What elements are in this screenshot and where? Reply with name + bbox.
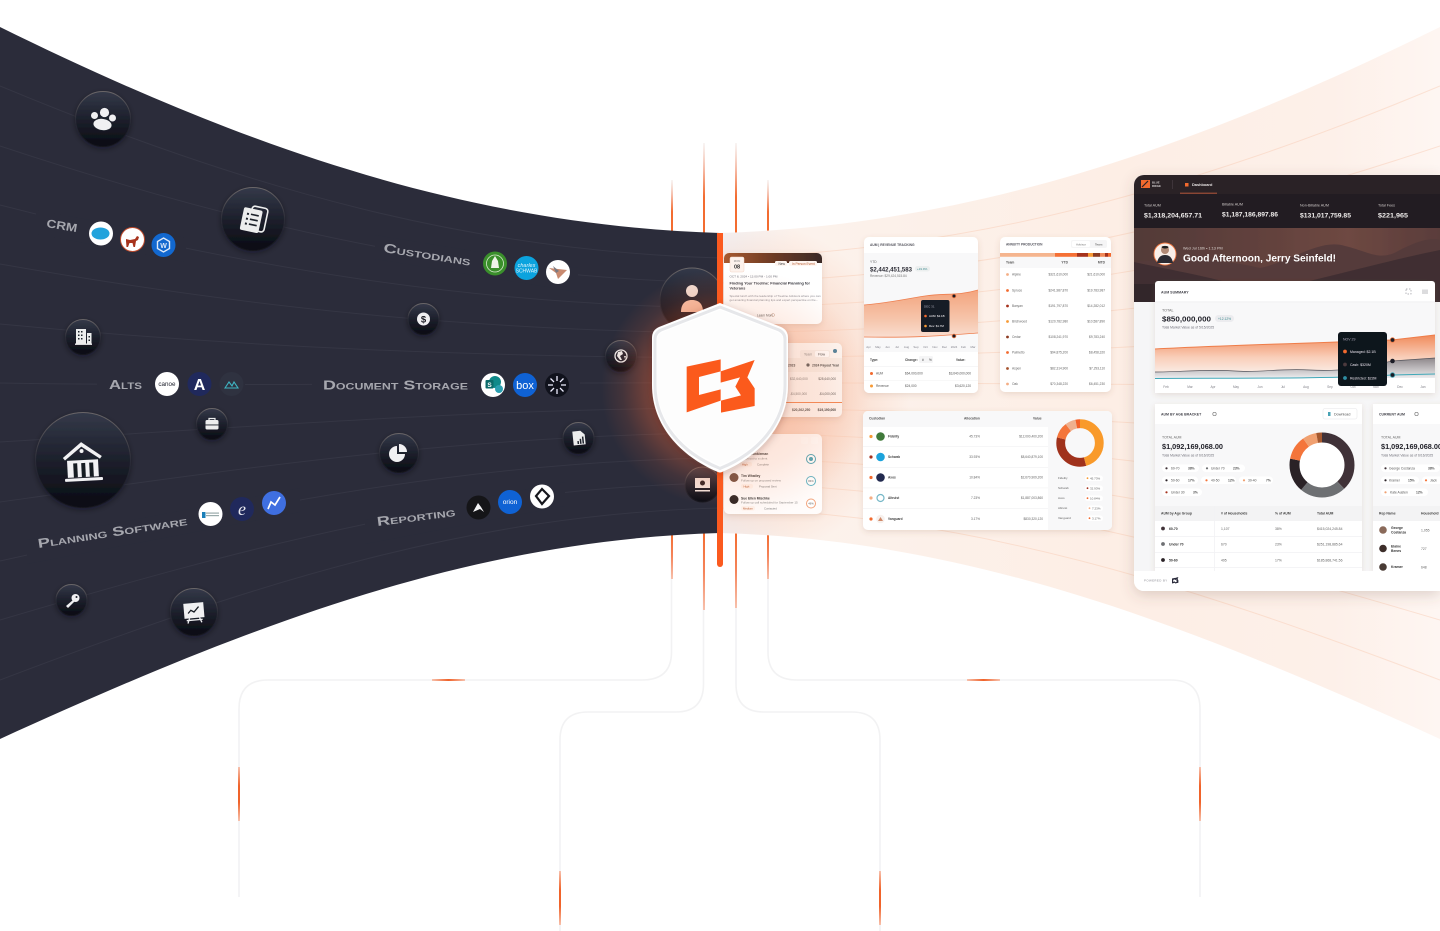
table rows: Schwab — [888, 455, 900, 459]
axis labels: Jul — [895, 345, 899, 349]
axis labels — [866, 345, 976, 349]
icon: dollar — [408, 304, 439, 334]
logo group: document storage: S — [487, 382, 492, 389]
card: tasks: Tim Whatley — [741, 474, 761, 478]
table rows: Fidelity — [888, 434, 899, 438]
shield emblem — [652, 303, 788, 472]
centre glow — [608, 277, 717, 500]
card: AUM revenue tracking: % — [929, 358, 932, 362]
card: AUM revenue tracking: $64,000,000 — [905, 372, 923, 376]
legend pills: 23% — [1233, 466, 1240, 470]
metrics strip: $1,318,204,657.71 — [1144, 212, 1202, 220]
icon: money under the shield — [685, 467, 720, 502]
card: event: MON — [734, 259, 740, 263]
card: custodian allocation: Custodian — [869, 416, 885, 420]
card: AUM summary: $850,000,000 — [1162, 314, 1211, 324]
card: AUM by age bracket: $1,092,169,068.00 — [1162, 444, 1223, 451]
card: AUM revenue tracking: Revenue: $29,424,515.84 — [870, 274, 907, 278]
table rows: 3.17% — [971, 517, 980, 521]
card: current AUM: George — [1391, 526, 1403, 530]
age table: $415,024,245.84 — [1317, 527, 1343, 531]
table rows: $8,640,879,100 — [1021, 455, 1043, 459]
card: payout table: -$4,000,000 — [819, 392, 836, 396]
legend pills: 30-40 — [1248, 478, 1257, 482]
legend pills: 7% — [1266, 478, 1271, 482]
card: AUM revenue tracking: Revenue — [876, 384, 889, 388]
card: AUM revenue tracking: Type: — [870, 358, 878, 362]
card: current AUM: TOTAL AUM — [1381, 436, 1400, 440]
card: event: Veterans — [730, 286, 745, 290]
age table — [1161, 512, 1343, 562]
logo: orange flag mark — [687, 359, 755, 413]
logo group: custodians: SCHWAB — [516, 268, 538, 274]
chart tooltip — [1338, 332, 1387, 386]
axis labels: Aug — [904, 345, 909, 349]
card: current AUM: 727 — [1421, 547, 1427, 551]
card: payout table: -$4,500,000 — [790, 392, 807, 396]
donut legend: 3.17% — [1092, 516, 1101, 520]
metrics strip: $1,187,186,897.86 — [1222, 212, 1278, 218]
axis labels: Apr — [866, 345, 871, 349]
card: AUM revenue tracking: $3,640,000,000 — [949, 372, 971, 376]
area chart — [864, 290, 978, 337]
donut legend: 32.93% — [1090, 486, 1101, 490]
card: custodian allocation: Allocation — [964, 416, 980, 420]
card: tasks: High — [744, 484, 750, 488]
icon: report document — [563, 422, 594, 454]
card: current AUM: Household — [1421, 512, 1439, 516]
chart tooltip: Cash: $320M — [1350, 363, 1371, 367]
card: tasks: Complete — [757, 462, 769, 466]
age table: 38% — [1275, 527, 1282, 531]
age table: $185,868,741.56 — [1317, 558, 1343, 562]
chart tooltip: Rev: $1.7M — [929, 324, 944, 328]
axis labels: Jan — [1420, 385, 1426, 389]
card: tasks: Proposal Sent — [759, 484, 777, 488]
right funnel panel — [720, 27, 1440, 739]
logo group: reporting — [466, 484, 554, 520]
table rows: Aspen — [1012, 366, 1021, 370]
card: current AUM: 12% — [1416, 490, 1423, 494]
icon: presentation chart — [170, 588, 218, 636]
donut legend — [1058, 476, 1103, 521]
top navigation — [1134, 175, 1440, 194]
card: AUM summary: AUM SUMMARY — [1161, 290, 1189, 294]
card: AUM summary: TOTAL — [1162, 308, 1174, 312]
table rows: Axos — [888, 476, 896, 480]
table rows: $82,314,900 — [1050, 366, 1068, 370]
axis labels: Oct — [1351, 385, 1356, 389]
table rows: Banyan — [1012, 304, 1023, 308]
card: AUM summary: Total Market Value as of 5/15/2025 — [1162, 326, 1214, 330]
card: AUM by age bracket: Total Market Value as of 6/16/2025 — [1162, 454, 1214, 458]
card: current AUM: Kramer — [1391, 565, 1404, 569]
logo group: alts: canoe — [158, 381, 176, 388]
logo group: custodians: charles — [518, 263, 536, 269]
table rows: 45.73% — [969, 434, 980, 438]
age table: 60-70 — [1169, 527, 1178, 531]
logo group: document storage — [481, 373, 569, 397]
card: AUM by age bracket — [1155, 404, 1362, 571]
card: current AUM: Costanza — [1391, 530, 1406, 534]
card: payout table: 2023 — [788, 364, 796, 368]
axis labels: Sep — [1327, 385, 1333, 389]
user avatar — [1154, 243, 1176, 265]
top navigation: Dashboard — [1192, 182, 1213, 187]
table rows: $2,670,909,200 — [1021, 476, 1043, 480]
card: event — [724, 253, 822, 324]
centre orange bar — [717, 233, 723, 567]
chart tooltip: NOV 29 — [1343, 338, 1356, 342]
axis labels: Mar — [1187, 385, 1194, 389]
donut legend: Altruist — [1058, 506, 1067, 510]
card: current AUM: George Costanza — [1389, 466, 1415, 470]
area chart — [1155, 335, 1435, 378]
chart tooltip: Restricted: $22M — [1350, 376, 1377, 380]
card: payout table: $28,640,000 — [818, 377, 836, 381]
axis labels: Oct — [923, 345, 928, 349]
age table: 17% — [1275, 558, 1282, 562]
axis labels: Nov — [932, 345, 938, 349]
table rows: Vanguard — [888, 517, 903, 521]
card: tasks: Contacted — [764, 506, 777, 510]
metrics strip: Billable AUM — [1222, 202, 1243, 206]
axis labels: Aug — [1303, 385, 1309, 389]
card: AUM revenue tracking: Change: — [905, 358, 918, 362]
table rows: $120,782,980 — [1048, 320, 1068, 324]
card: current AUM — [1373, 404, 1440, 571]
table rows — [1006, 272, 1105, 386]
card: payout table: $20,262,250 — [792, 408, 811, 412]
card: annuity production: YTD — [1061, 260, 1069, 264]
chart tooltip: DEC 31 — [924, 304, 935, 308]
axis labels: Mar — [971, 345, 976, 349]
metrics strip — [1134, 194, 1440, 228]
table rows: $70,348,220 — [1050, 382, 1068, 386]
table rows: Palmetto — [1012, 350, 1025, 354]
axis labels: Feb — [1163, 385, 1169, 389]
card: tasks: Medium — [743, 506, 754, 510]
metrics strip: Total Fees — [1378, 204, 1395, 208]
table rows: Spruce — [1012, 288, 1022, 292]
table rows: $9,783,240 — [1089, 335, 1105, 339]
top navigation: BLUE — [1152, 180, 1160, 184]
donut legend: 10.84% — [1090, 496, 1101, 500]
table rows: $191,797,870 — [1048, 304, 1068, 308]
card: current AUM: CURRENT AUM — [1379, 412, 1405, 416]
table rows: $241,987,870 — [1048, 288, 1068, 292]
age table: # of Households — [1221, 512, 1247, 516]
card: AUM by age bracket: TOTAL AUM — [1162, 436, 1181, 440]
donut legend: 45.73% — [1090, 476, 1101, 480]
main dashboard window — [1134, 175, 1440, 591]
logo group: planning software: e — [238, 499, 246, 519]
logo group: planning software — [198, 491, 286, 526]
card: AUM revenue tracking — [864, 237, 978, 393]
table rows: $6,451,230 — [1089, 382, 1105, 386]
metrics strip: $221,965 — [1378, 212, 1408, 220]
age table: Total AUM — [1317, 512, 1334, 516]
donut chart — [1294, 438, 1350, 492]
card: tasks: Jason Dunkleman — [740, 452, 768, 456]
heading: Alts: Alts — [109, 377, 142, 392]
card: current AUM: 1,055 — [1421, 528, 1430, 532]
card: event: In Person Event — [792, 262, 815, 266]
card: event: get amazing financial planning tips and expert perspective on the... — [730, 298, 818, 302]
legend pills: 3% — [1193, 490, 1198, 494]
axis labels — [1164, 386, 1426, 389]
card: tasks: Reach out to a client — [740, 456, 768, 460]
legend pills: 17% — [1188, 478, 1195, 482]
legend pills — [1165, 467, 1271, 494]
logo group: reporting: orion — [503, 499, 518, 506]
card: tasks: Follow up call scheduled for September 15 — [741, 500, 798, 504]
card: payout table — [724, 343, 842, 417]
legend pills: Under 30 — [1171, 490, 1185, 494]
table rows: $10,587,890 — [1087, 320, 1105, 324]
axis labels: 2024 — [951, 345, 958, 349]
legend pills: 12% — [1228, 478, 1235, 482]
icon: briefcase — [196, 408, 228, 440]
donut chart — [1061, 424, 1099, 462]
age table: 670 — [1221, 542, 1227, 546]
main dashboard window: Wed Jul 16th • 1:13 PM — [1183, 246, 1223, 250]
icon: bank building — [36, 412, 130, 508]
stacked bar — [1000, 253, 1111, 257]
legend pills: 50-60 — [1171, 478, 1180, 482]
card: event: Learn More — [757, 314, 774, 318]
table rows: Birchwood — [1012, 320, 1027, 324]
card: AUM revenue tracking: $2,442,451,583 — [870, 268, 913, 274]
age table: 1,107 — [1221, 527, 1230, 531]
axis labels: Jun — [1257, 385, 1263, 389]
axis labels: Nov — [1373, 385, 1379, 389]
card: current AUM: $1,092,169,068.00 — [1381, 444, 1440, 451]
card: AUM revenue tracking: $24,000 — [905, 384, 917, 388]
legend pills: Under 70 — [1211, 466, 1225, 470]
legend pills: 60-70 — [1171, 466, 1180, 470]
axis labels: May — [1233, 385, 1239, 389]
card: payout table: Flow — [818, 352, 826, 356]
card: annuity production: Advisor — [1076, 242, 1086, 246]
icon: people group — [76, 92, 130, 146]
axis labels: May — [875, 345, 881, 349]
metrics strip: $131,017,759.85 — [1300, 212, 1351, 220]
legend pills: 38% — [1188, 466, 1195, 470]
heading: CRM: CRM — [46, 218, 78, 235]
table rows: $19,783,987 — [1087, 288, 1105, 292]
card: annuity production: Team — [1095, 242, 1103, 246]
card: custodian allocation: Value — [1033, 416, 1042, 420]
card: AUM summary — [1155, 281, 1435, 393]
card: tasks — [724, 434, 822, 514]
card: AUM revenue tracking: AUM — [876, 372, 883, 376]
table rows: $108,241,970 — [1048, 335, 1068, 339]
axis labels: Dec — [1397, 385, 1403, 389]
card: AUM revenue tracking: YTD — [870, 260, 877, 264]
metrics strip: Total AUM — [1144, 204, 1161, 208]
card: tasks: 84% — [808, 479, 814, 483]
card: tasks: 46% — [808, 502, 814, 506]
footer: powered by — [1134, 571, 1440, 591]
table rows: $12,000,400,200 — [1019, 434, 1043, 438]
age table: AUM by Age Group — [1161, 512, 1192, 516]
age table: 50-60 — [1169, 558, 1178, 562]
card: tasks: Sue Ellen Mischke — [741, 496, 770, 500]
logo group: document storage: box — [516, 380, 534, 392]
heading: Reporting: Reporting — [376, 504, 456, 529]
card: annuity production: ANNUITY PRODUCTION — [1006, 242, 1043, 246]
age table: Under 70 — [1169, 542, 1184, 546]
top navigation: RIDGE — [1152, 184, 1161, 188]
icon: office building — [66, 320, 100, 354]
card: custodian allocation — [863, 411, 1112, 530]
axis labels: Feb — [961, 345, 966, 349]
donut legend: 7.23% — [1092, 506, 1101, 510]
card: current AUM: 38% — [1428, 466, 1435, 470]
table rows: $321,610,000 — [1048, 272, 1068, 276]
card: event: OCT 8, 2024 • 12:00 PM - 1:00 PM — [730, 274, 778, 278]
card: payout table: 2024 Payout Year — [812, 364, 840, 368]
card: current AUM: Elaine — [1391, 544, 1401, 548]
table rows: $7,293,110 — [1089, 366, 1105, 370]
card: AUM revenue tracking: # — [922, 358, 924, 362]
age table: $251,198,885.64 — [1317, 542, 1343, 546]
icon: clipboard documents — [222, 188, 284, 250]
axis labels: Sep — [913, 345, 919, 349]
hero banner with mountains — [1134, 228, 1440, 302]
logo group: alts — [155, 372, 244, 396]
donut legend: Axos — [1058, 496, 1065, 500]
card: AUM revenue tracking: Value: — [956, 358, 965, 362]
table rows — [869, 432, 1043, 523]
card: annuity production: MTD — [1098, 260, 1106, 264]
donut legend: Fidelity — [1058, 476, 1068, 480]
glow tint over the small cards — [724, 270, 870, 520]
icon: pie chart — [380, 434, 418, 472]
axis labels: Apr — [1211, 385, 1216, 389]
connector lines below and above the funnel — [238, 143, 1201, 931]
icon: dollar: $ — [421, 314, 427, 325]
card: AUM by age bracket: AUM BY AGE BRACKET — [1161, 412, 1202, 416]
card: event: New — [778, 262, 786, 266]
axis labels: Jun — [885, 345, 890, 349]
card: tasks: Follow up on proposed review — [741, 478, 782, 482]
logo group: CRM — [89, 222, 176, 257]
orange accents — [238, 143, 1201, 925]
table rows: Oak — [1012, 382, 1018, 386]
table rows: $830,320,120 — [1024, 517, 1043, 521]
card: current AUM: Kate Austen — [1390, 490, 1408, 494]
card: current AUM: Benes — [1391, 549, 1401, 553]
icon: key — [56, 584, 87, 616]
icon: person under the shield — [660, 268, 717, 323]
card: event: Finding Your Treeline: Financial Planning for — [730, 282, 810, 286]
footer: powered by: POWERED BY — [1144, 578, 1168, 582]
heading: Planning Software: Planning Software — [37, 513, 188, 551]
icon: globe — [606, 340, 636, 372]
logo group: CRM: W — [160, 243, 167, 250]
donut legend: Vanguard — [1058, 516, 1071, 520]
card: AUM revenue tracking: +19.9% — [917, 267, 928, 271]
card: AUM revenue tracking: $3,620,120 — [955, 384, 971, 388]
card: current AUM: 15% — [1408, 478, 1415, 482]
metrics strip: Non-Billable AUM — [1300, 204, 1329, 208]
logo group: custodians — [483, 252, 570, 284]
chart tooltip: AUM: $2.1B — [929, 314, 945, 318]
card: AUM by age bracket: Download — [1334, 412, 1350, 416]
table rows: $94,875,200 — [1050, 350, 1068, 354]
table rows: Altruist — [888, 496, 900, 500]
card: payout table: $32,640,000 — [790, 377, 808, 381]
chart tooltip — [921, 300, 950, 332]
card: annuity production — [1000, 237, 1111, 392]
age table: 495 — [1221, 558, 1227, 562]
donut legend: Schwab — [1058, 486, 1069, 490]
card: AUM revenue tracking: AUM | REVENUE TRACKING — [870, 243, 915, 247]
table rows: Cedar — [1012, 335, 1022, 339]
legend pills: 40-50 — [1211, 478, 1220, 482]
card: tasks: High — [742, 462, 748, 466]
card: event: Special lunch with the leadership of Treeline Advisors where you can — [730, 294, 821, 298]
table rows: $1,887,003,860 — [1021, 496, 1043, 500]
table rows: 7.23% — [971, 496, 980, 500]
age table: % of AUM — [1275, 512, 1291, 516]
card: event: 08 — [734, 264, 740, 270]
card: current AUM: Total Market Value as of 6/16/2025 — [1381, 454, 1433, 458]
card: payout table: Team — [804, 352, 812, 356]
card: annuity production: Team — [1006, 260, 1014, 264]
card: payout table: $19,190,000 — [818, 408, 836, 412]
table rows: $14,282,012 — [1087, 304, 1105, 308]
axis labels: Dec — [942, 345, 948, 349]
axis labels: Jul — [1281, 385, 1285, 389]
main dashboard window: Good Afternoon, Jerry Seinfeld! — [1183, 252, 1336, 264]
heading: Custodians: Custodians — [383, 240, 472, 269]
card: current AUM: Kramer — [1389, 478, 1401, 482]
heading: Document Storage: Document Storage — [323, 378, 468, 392]
table rows: $8,458,320 — [1089, 350, 1105, 354]
logo group: alts: A — [194, 377, 206, 394]
table rows: Alpine — [1012, 272, 1021, 276]
chart tooltip: Managed: $2.1B — [1350, 350, 1376, 354]
card: current AUM: Rep Name — [1379, 512, 1396, 516]
table rows: 10.84% — [969, 476, 980, 480]
card: AUM summary: +12.12% — [1218, 317, 1231, 321]
table rows: $21,610,000 — [1087, 272, 1105, 276]
table rows: 33.93% — [969, 455, 980, 459]
card: current AUM: 648 — [1421, 566, 1427, 570]
age table: 23% — [1275, 542, 1282, 546]
left dark funnel panel — [0, 27, 720, 739]
card: current AUM: Jack — [1430, 478, 1437, 482]
